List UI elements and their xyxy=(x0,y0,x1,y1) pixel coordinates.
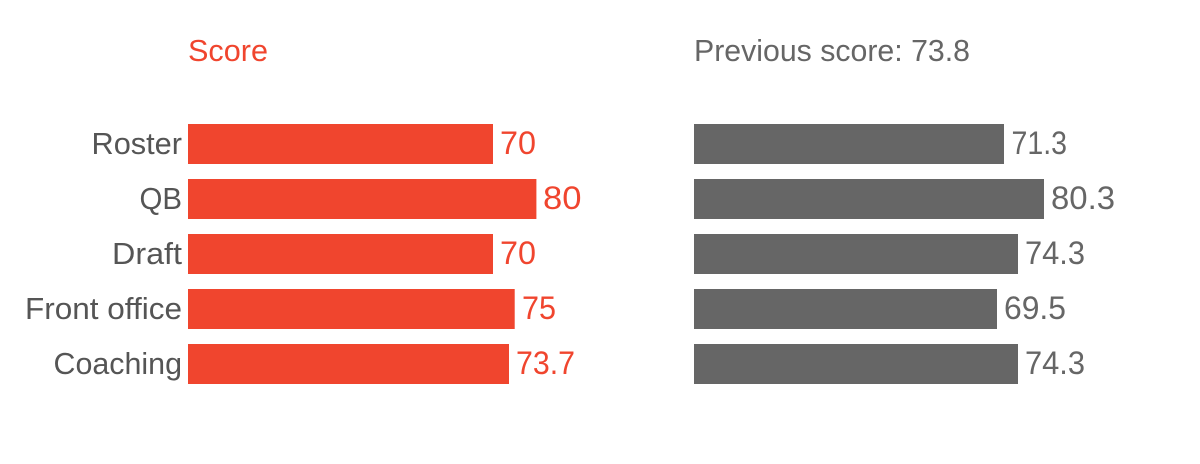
row: Roster xyxy=(92,124,536,164)
row: QB: QB xyxy=(140,181,182,216)
row: Coaching: Coaching xyxy=(54,346,182,381)
row: Roster: Roster xyxy=(92,126,182,161)
panel: score xyxy=(25,33,582,384)
row: Draft previous: 74.3 xyxy=(1025,235,1085,271)
row: Coaching previous: 74.3 xyxy=(1025,345,1085,381)
row: Front office xyxy=(25,289,556,329)
row: Draft: Draft xyxy=(112,236,182,271)
row: Front office: 75 xyxy=(522,290,556,326)
row: QB previous xyxy=(694,179,1115,219)
row: Coaching xyxy=(54,344,575,384)
row: QB: 80 xyxy=(543,180,582,216)
row: Front office previous xyxy=(694,289,1066,329)
row: QB previous: 80.3 xyxy=(1051,180,1115,216)
row: QB xyxy=(140,179,582,219)
row: Coaching: 73.7 xyxy=(516,345,575,381)
row: Draft previous xyxy=(694,234,1085,274)
row: Front office: Front office xyxy=(25,291,182,326)
row: Draft: 70 xyxy=(500,235,536,271)
row: Roster previous xyxy=(694,124,1067,164)
row: Roster: 70 xyxy=(500,125,536,161)
heading: score: Score xyxy=(188,33,268,68)
row: Coaching previous xyxy=(694,344,1085,384)
heading: previous score: Previous score: 73.8 xyxy=(694,33,970,68)
row: Front office previous: 69.5 xyxy=(1004,290,1066,326)
row: Roster previous: 71.3 xyxy=(1012,125,1067,161)
panel: previous score xyxy=(694,33,1115,384)
row: Draft xyxy=(112,234,536,274)
